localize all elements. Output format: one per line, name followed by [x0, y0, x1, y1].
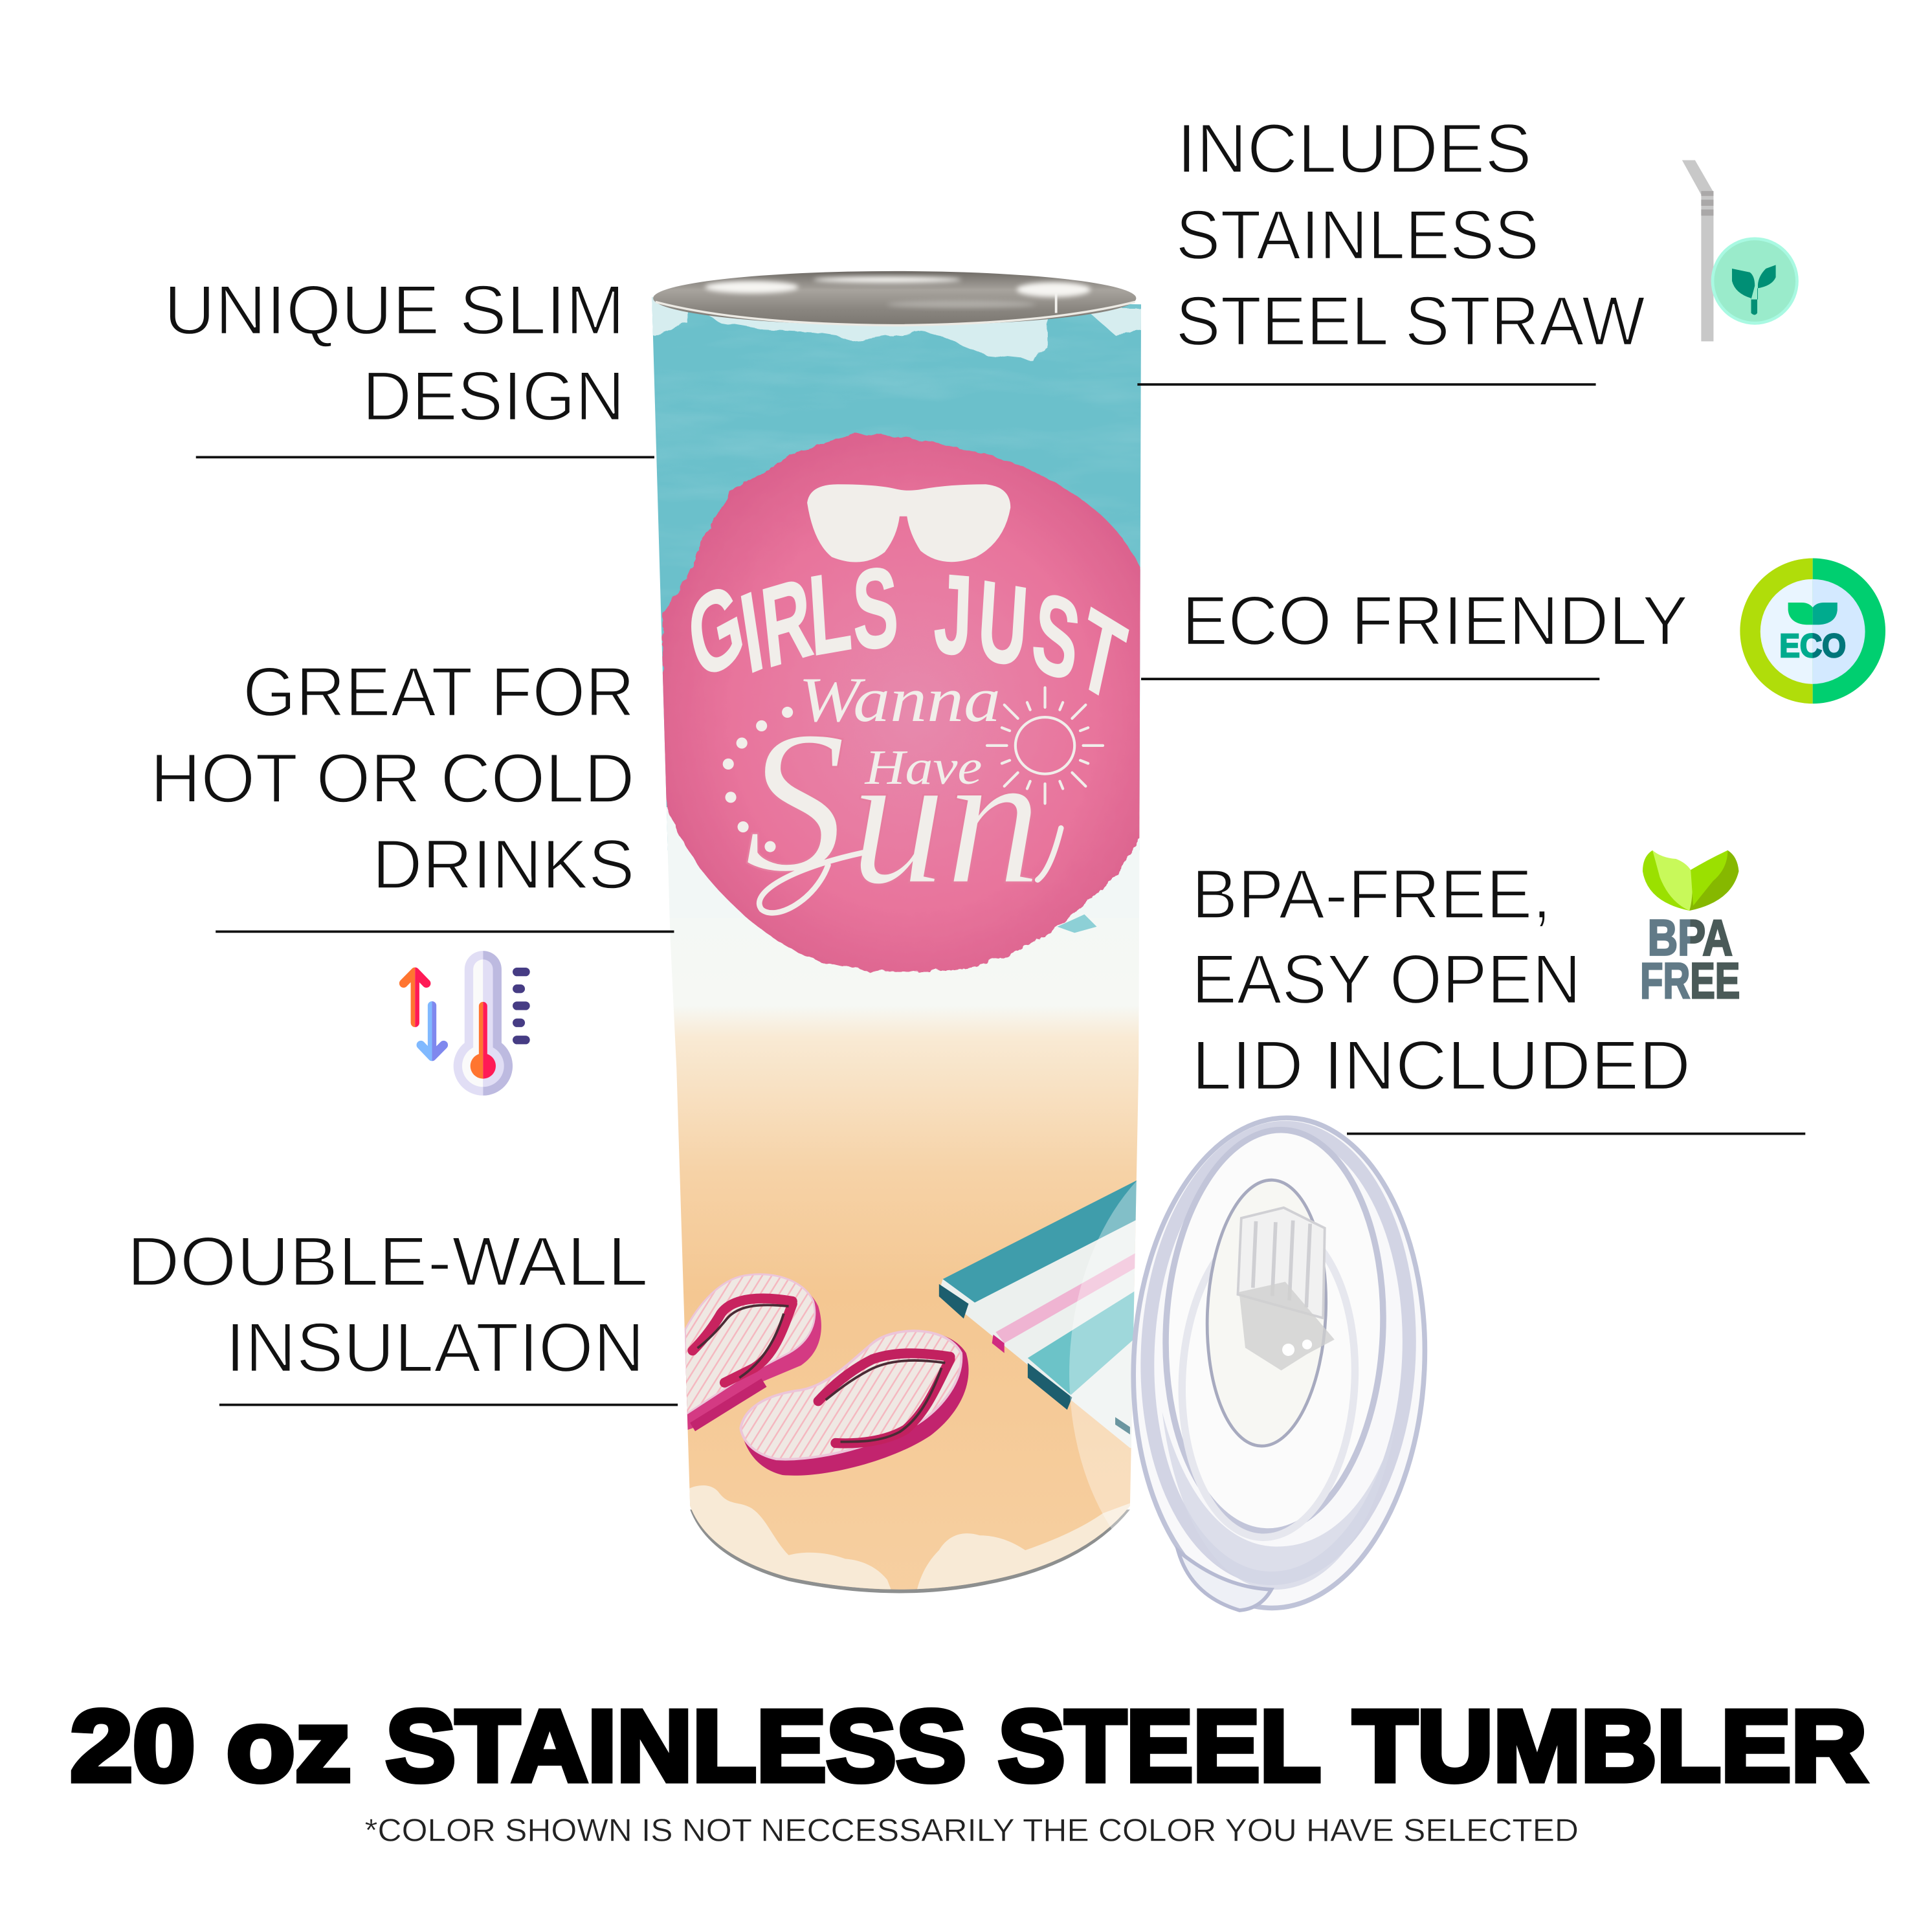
label: hot or cold: HOT OR COLD	[150, 739, 635, 817]
decorative swash on the S	[759, 828, 1061, 913]
sand and white background	[670, 918, 1139, 1590]
icon: eco badge	[1740, 558, 1885, 704]
top white clouds	[647, 296, 1146, 360]
translucent lid side	[1059, 1124, 1405, 1607]
pink watercolor circle	[662, 434, 1164, 972]
label: bpa free lid: LID INCLUDED	[1192, 1027, 1691, 1104]
slogan: girls just: GIRLSJUST	[679, 543, 1135, 727]
label: double wall insulation: DOUBLE-WALL	[127, 1223, 648, 1300]
slogan: sun: un	[850, 712, 1041, 924]
sun icon	[987, 687, 1103, 803]
label: hot or cold: GREAT FOR	[243, 653, 635, 731]
title: TUMBLER	[1353, 1690, 1867, 1803]
label: unique slim design: DESIGN	[362, 357, 625, 435]
icon: bpa free: BPA	[1648, 909, 1733, 966]
sunglasses	[807, 484, 1010, 562]
label: bpa free lid: EASY OPEN	[1192, 940, 1581, 1018]
flip flop right	[740, 1331, 969, 1476]
spout mechanism	[1234, 1206, 1340, 1373]
slogan: have: Have	[864, 740, 982, 795]
label: eco friendly: ECO FRIENDLY	[1182, 582, 1688, 660]
steel rim	[653, 271, 1136, 326]
label: stainless steel straw	[1137, 110, 1645, 384]
label: unique slim design	[164, 271, 654, 457]
white fade under the teal	[667, 807, 1139, 850]
label: stainless steel straw: STEEL STRAW	[1175, 282, 1645, 360]
icon: straw with sprout	[1682, 161, 1799, 341]
label: stainless steel straw: STAINLESS	[1175, 196, 1539, 274]
slogan: wanna: Wanna	[799, 665, 1001, 735]
disclaimer: *COLOR SHOWN IS NOT NECCESSARILY THE COLOR YOU HAVE SELECTED	[365, 1812, 1579, 1848]
teal watercolor band	[641, 289, 1152, 850]
title: STEEL	[998, 1690, 1321, 1803]
label: bpa free lid	[1192, 855, 1805, 1134]
label: double wall insulation	[127, 1223, 678, 1405]
label: hot or cold: DRINKS	[372, 826, 635, 904]
label: unique slim design: UNIQUE SLIM	[164, 271, 625, 349]
title: 20 oz	[71, 1690, 351, 1803]
icon: bpa free: FREE	[1640, 952, 1740, 1009]
label: double wall insulation: INSULATION	[225, 1309, 645, 1386]
flip flop left	[685, 1274, 821, 1430]
spout oval	[1201, 1177, 1332, 1449]
tumbler body print	[641, 289, 1164, 1614]
slogan: sun	[744, 689, 1061, 924]
label: bpa free lid: BPA-FREE,	[1192, 855, 1551, 933]
icon: eco badge: ECO	[1779, 627, 1846, 664]
label: hot or cold	[150, 653, 674, 931]
lid	[1059, 1109, 1436, 1618]
title: STAINLESS	[386, 1690, 966, 1803]
title	[71, 1690, 1867, 1803]
bottom clouds	[684, 1485, 1146, 1614]
slogan: sun: S	[744, 689, 846, 914]
lower lid band	[1155, 1412, 1396, 1595]
icon: bpa free	[1640, 850, 1740, 1009]
label: stainless steel straw: INCLUDES	[1177, 110, 1532, 188]
lid tab	[1175, 1551, 1273, 1612]
icon: thermometer	[404, 951, 526, 1096]
dots	[723, 707, 793, 852]
small teal patch	[1058, 915, 1097, 933]
tumbler	[641, 271, 1164, 1614]
beach towel	[939, 1175, 1146, 1448]
